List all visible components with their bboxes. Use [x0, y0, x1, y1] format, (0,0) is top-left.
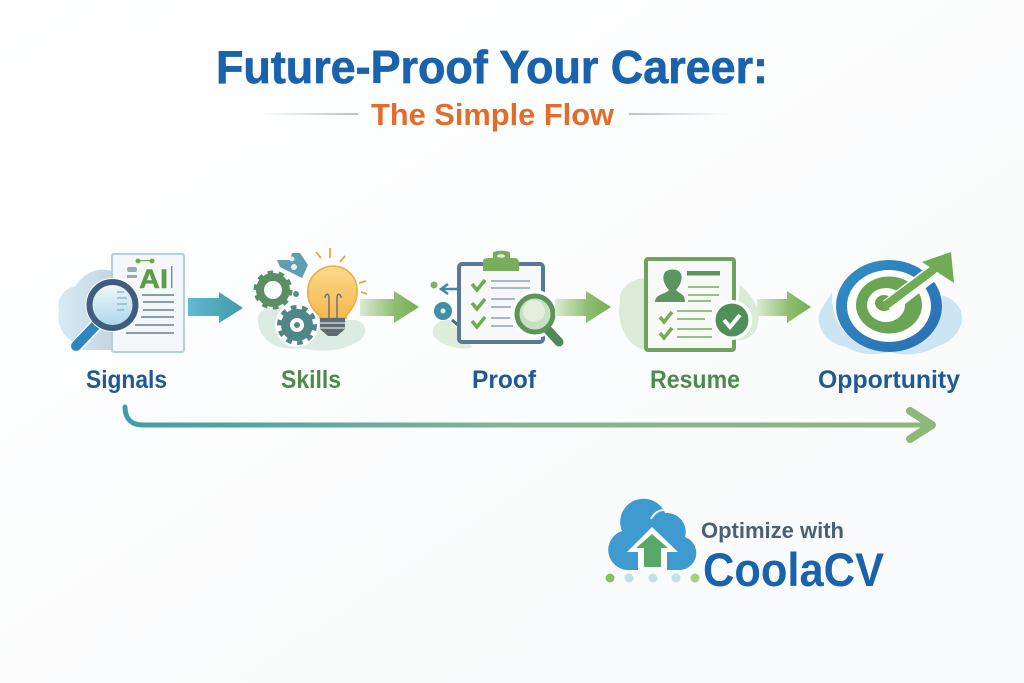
- icon: blue cloud: [819, 292, 962, 354]
- icon: pale green cloud: [433, 320, 472, 349]
- icon: light bulb: [306, 248, 367, 336]
- icon: AI document: AI: [139, 264, 168, 294]
- step labels: Proof: [472, 366, 537, 394]
- title: Future-Proof Your Career:: [216, 41, 768, 93]
- icon: check badge: [712, 300, 752, 340]
- arrow: proof to resume: [555, 291, 611, 323]
- icon: small teal gear: [277, 253, 308, 278]
- icon: pale cloud: [258, 307, 365, 351]
- step labels: Skills: [281, 366, 341, 394]
- icon: clipboard: [459, 251, 543, 342]
- icon: target rings: [836, 260, 942, 352]
- step: proof: [430, 251, 559, 349]
- long arrow: signals to opportunity: [125, 407, 932, 439]
- step: resume: [619, 259, 759, 350]
- logo: CoolaCV: Optimize with: [701, 518, 844, 543]
- logo: CoolaCV: [606, 499, 885, 596]
- step labels: Opportunity: [818, 366, 960, 394]
- icon: resume document: [646, 259, 734, 350]
- step: signals: [58, 254, 184, 352]
- icon: green gear: [256, 272, 290, 308]
- step: opportunity: [819, 252, 962, 354]
- icon: connector dots and arrow: [430, 282, 462, 325]
- icon: green magnifier: [511, 290, 559, 342]
- icon: cloud behind document: [58, 270, 118, 350]
- icon: growth arrow: [886, 252, 954, 307]
- arrow: resume to opportunity: [757, 291, 811, 323]
- subtitle with rules: The Simple Flow: [371, 97, 615, 132]
- arrow: skills to proof: [360, 291, 419, 323]
- icon: magnifier: [76, 278, 140, 346]
- step: skills: [256, 248, 367, 351]
- logo: CoolaCV: CoolaCV: [703, 543, 885, 596]
- icon: cloud upload: [608, 499, 696, 570]
- step labels: Resume: [650, 366, 740, 394]
- step labels: [86, 366, 960, 394]
- step labels: Signals: [86, 366, 167, 394]
- icon: teal gear: [275, 303, 319, 347]
- icon: pale green cloud: [619, 278, 759, 350]
- icon: dots: [606, 574, 700, 582]
- arrow: signals to skills: [188, 292, 243, 323]
